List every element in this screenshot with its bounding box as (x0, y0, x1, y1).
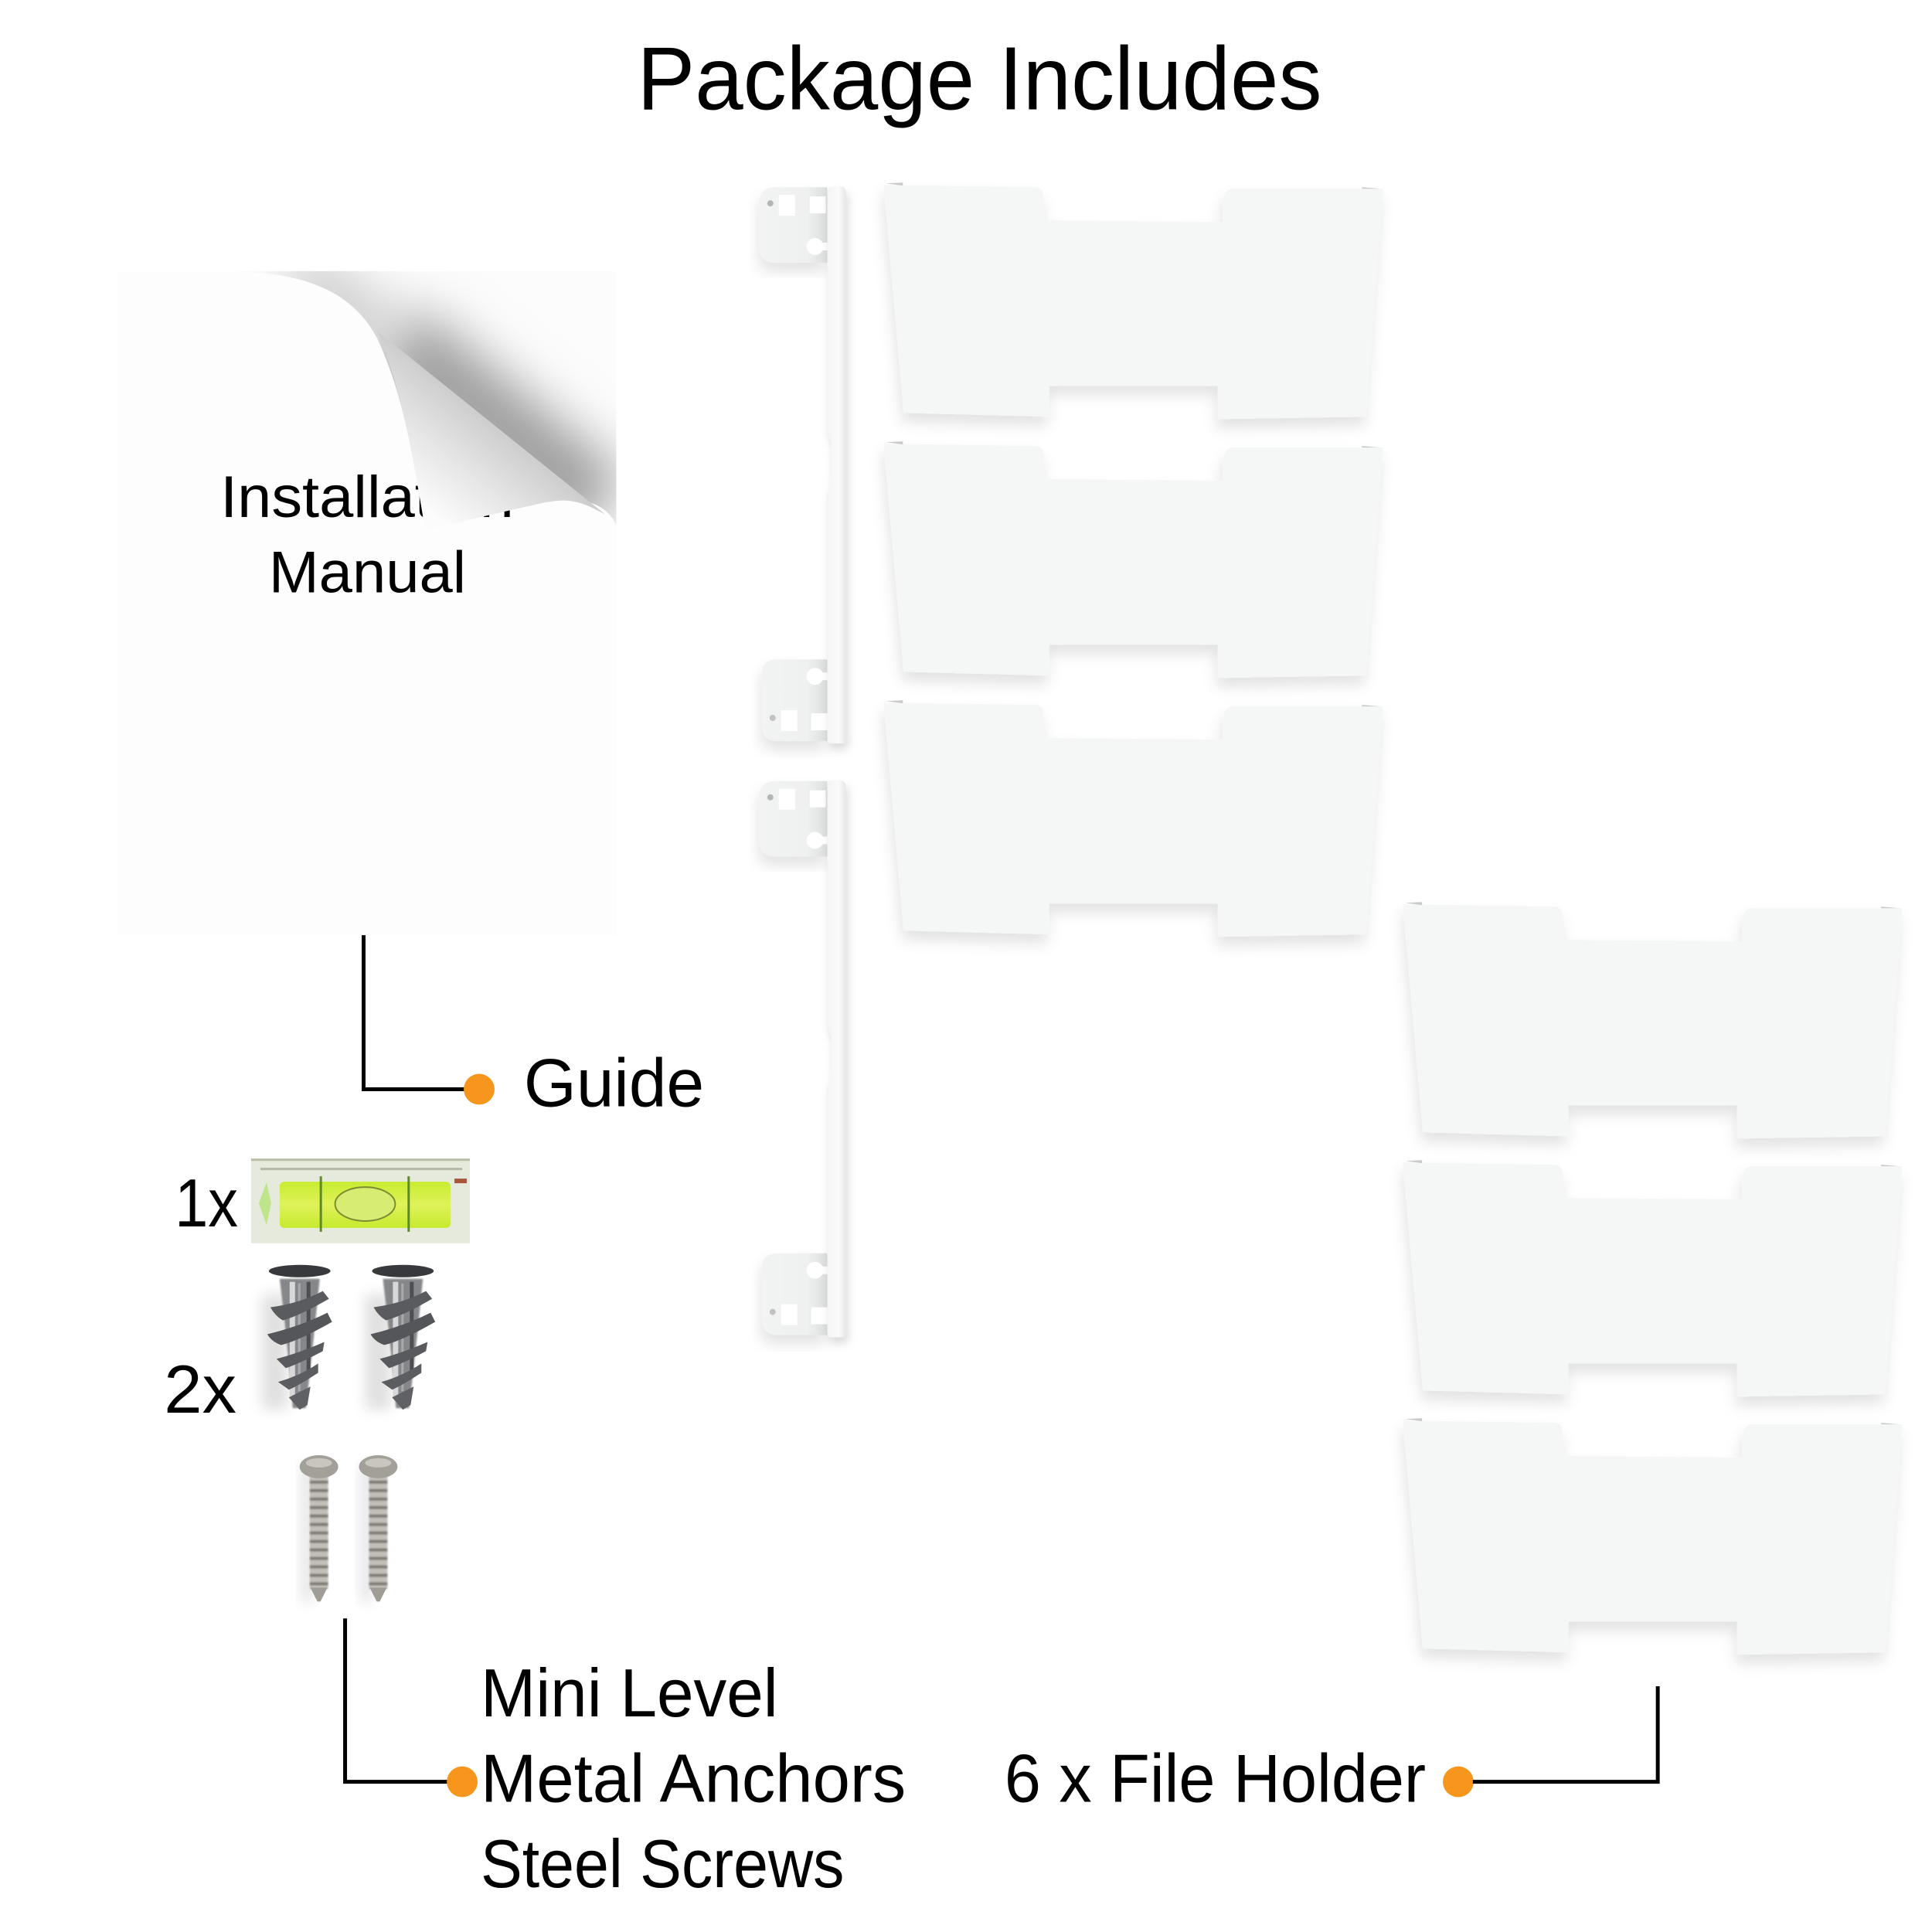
label: hardware list: Metal Anchors (481, 1741, 906, 1817)
marker: hardware (447, 1767, 478, 1798)
marker: guide (464, 1074, 495, 1104)
icon: metal anchors (262, 1265, 435, 1410)
manual title text: Installation (220, 464, 514, 530)
file holder 1 (883, 182, 1383, 419)
file holder 4 (1403, 902, 1902, 1138)
label: file holder: 6 x File Holder (1005, 1741, 1426, 1817)
icon: steel screws (300, 1455, 397, 1602)
connector: guide (363, 935, 470, 1089)
paper sheet (117, 271, 616, 935)
curl shadow on sheet behind (263, 271, 617, 526)
manual title text: Manual (269, 540, 466, 606)
page curl flap (377, 332, 605, 530)
connector: file holder (1473, 1686, 1658, 1782)
title: Package Includes (637, 29, 1322, 129)
connector: hardware (345, 1618, 450, 1782)
label: guide: Guide (524, 1045, 704, 1121)
quantity: 2x: 2x (164, 1352, 236, 1427)
wall rail: upper (760, 186, 845, 743)
file holder 5 (1403, 1160, 1902, 1396)
icon: mini level (251, 1158, 470, 1243)
label: hardware list: Mini Level (481, 1655, 778, 1731)
file holder 3 (883, 700, 1383, 937)
quantity: 1x: 1x (175, 1165, 238, 1241)
wall rail: lower (760, 781, 845, 1337)
panel: installation manual (226, 271, 617, 593)
file holder 6 (1403, 1418, 1902, 1655)
label: hardware list: Steel Screws (481, 1826, 845, 1902)
file holder 2 (883, 441, 1383, 678)
marker: file holder (1443, 1767, 1474, 1798)
